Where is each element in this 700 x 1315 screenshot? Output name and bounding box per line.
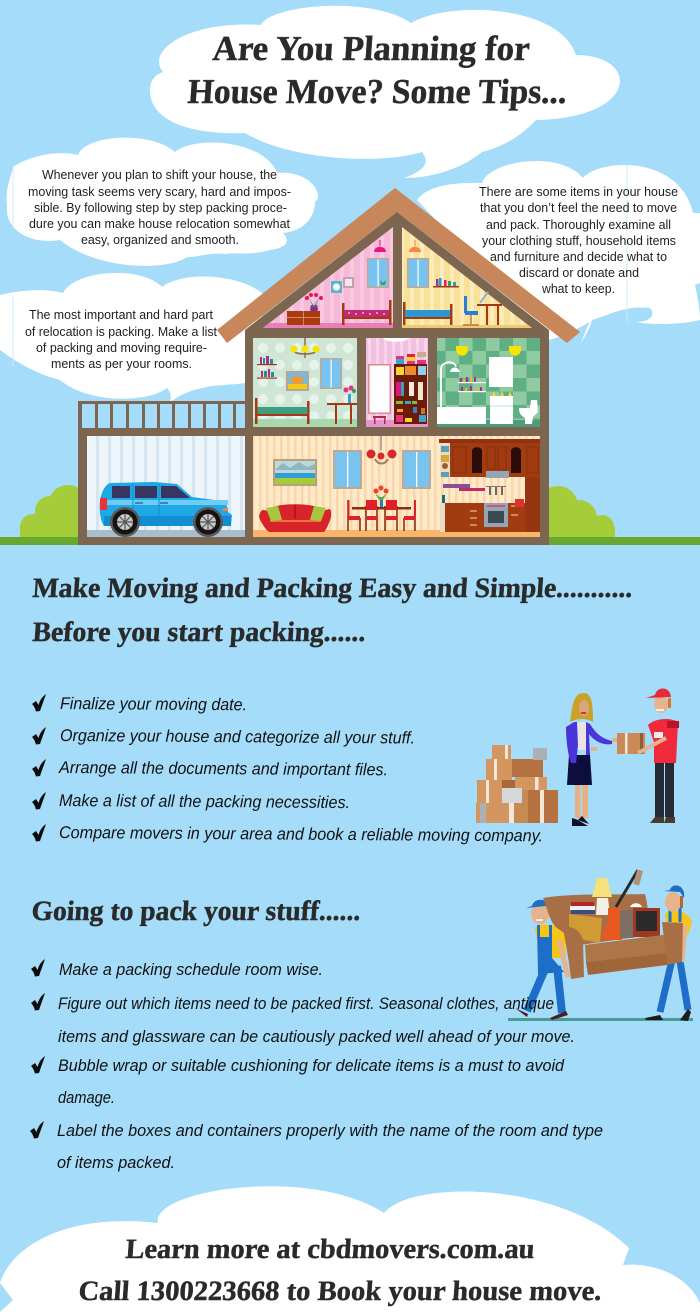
mirror [489, 357, 513, 387]
ground [0, 537, 700, 545]
toy [601, 908, 625, 940]
seat [585, 934, 670, 962]
item 1: Finalize your moving date. [60, 694, 247, 714]
room: green bedroom [253, 338, 357, 427]
cardboard box [569, 914, 602, 943]
room: pink bedroom [263, 227, 393, 328]
wheels [110, 507, 223, 537]
wardrobe [394, 364, 427, 424]
text block: most important: The most important and hard part [29, 308, 214, 322]
picture [273, 459, 317, 486]
illustration: movers carrying sofa [508, 869, 693, 1021]
hockey stick [616, 870, 638, 907]
flowers [344, 386, 356, 404]
item 5: Compare movers in your area and book a reliable moving company. [59, 823, 543, 845]
title: House Move? Some Tips... [186, 72, 568, 111]
text block: most important: of packing and moving require- [36, 341, 207, 355]
picture [286, 371, 309, 391]
room: closet [366, 338, 428, 427]
cloud: whenever you plan [7, 138, 318, 266]
text block: whenever you plan: easy, organized and smooth. [81, 233, 239, 247]
house frame [78, 212, 549, 545]
text block: some items: your clothing stuff, household items [482, 234, 676, 248]
item 3: Arrange all the documents and important files. [58, 758, 388, 779]
oven [484, 503, 508, 527]
item 2: Figure out which items need to be packed first. Seasonal clothes, antique [58, 994, 554, 1013]
lamp [592, 878, 612, 915]
window [320, 358, 342, 389]
text block: some items: There are some items in your house [479, 185, 678, 199]
heading: make moving: Before you start packing...... [32, 617, 367, 648]
ceiling lamp [383, 338, 409, 342]
bush left [20, 485, 88, 540]
dresser [287, 311, 320, 325]
balcony railing [78, 401, 245, 430]
text block: some items: that you don’t feel the need to move [480, 201, 677, 215]
wall shelves [443, 484, 506, 495]
chandelier [290, 338, 320, 358]
tv [633, 908, 660, 937]
lower cabinets [440, 477, 540, 532]
text block: whenever you plan [28, 168, 291, 247]
footer call to action [78, 1234, 603, 1307]
stool [373, 416, 386, 424]
faint seam lines in clouds [13, 165, 627, 366]
window [407, 258, 429, 288]
window [367, 258, 389, 288]
item 4 [30, 1121, 603, 1172]
pictures [331, 277, 354, 293]
dining table and chairs [348, 500, 416, 531]
item 4: Make a list of all the packing necessities. [59, 791, 350, 812]
arm left [563, 927, 584, 979]
lamp [374, 240, 386, 252]
item 4: of items packed. [57, 1153, 175, 1172]
mirror [368, 364, 391, 414]
window [333, 450, 362, 489]
cloud: footer [0, 1186, 700, 1315]
roof [217, 188, 580, 343]
chair [463, 296, 479, 325]
ground shadow [508, 1018, 693, 1021]
item 3 [31, 1056, 565, 1107]
toilet [519, 400, 538, 424]
upper cabinets [439, 439, 540, 478]
room: kitchen [439, 436, 540, 537]
washstand [490, 391, 513, 424]
flower vase [305, 293, 323, 315]
bed [255, 398, 310, 424]
item 1: Make a packing schedule room wise. [59, 960, 323, 979]
table [327, 403, 357, 424]
item 2: Organize your house and categorize all your stuff. [60, 726, 415, 747]
arm right [662, 922, 683, 965]
flower vase [374, 486, 388, 508]
text block: some items: and furniture and decide what to [490, 250, 667, 264]
shelves [257, 356, 277, 379]
item 3: damage. [58, 1088, 115, 1107]
heading: make moving [32, 573, 634, 648]
parcel [617, 733, 645, 754]
room: bathroom [437, 338, 540, 427]
shower [441, 362, 460, 408]
bookshelf [433, 278, 459, 288]
title: Are You Planning for [211, 29, 531, 68]
speech cloud: title [150, 6, 620, 178]
ceiling lamps [456, 346, 521, 356]
item 3: Bubble wrap or suitable cushioning for delicate items is a must to avoid [58, 1056, 565, 1075]
text block: whenever you plan: dure you can make house relocation somewhat [29, 217, 291, 231]
window [402, 450, 431, 489]
illustration: stack of boxes [476, 745, 558, 823]
cloud: some items [417, 161, 700, 348]
chandelier [366, 436, 396, 464]
checklist: packing [30, 959, 603, 1172]
text block: most important [25, 308, 218, 371]
mover left [515, 900, 568, 1020]
illustration: woman [566, 693, 618, 826]
item 2 [31, 993, 575, 1046]
room: living and dining [253, 436, 440, 537]
checklist: before packing [32, 694, 543, 845]
text block: most important: of relocation is packing. Make a list [25, 325, 218, 339]
plant [380, 280, 386, 285]
bath tub [437, 407, 486, 424]
boxes on wardrobe [396, 352, 426, 364]
books [570, 902, 595, 914]
mover right [645, 885, 692, 1021]
garage [87, 436, 245, 537]
heading: make moving: Make Moving and Packing Easy and Simple........... [32, 573, 634, 604]
sofa [543, 869, 683, 979]
text block: some items: and pack. Thoroughly examine all [486, 218, 671, 232]
house [78, 188, 580, 545]
cloud: most important [0, 273, 262, 402]
desk and monitor [477, 292, 502, 325]
text block: whenever you plan: sible. By following step by step packing proce- [34, 201, 287, 215]
text block: whenever you plan: Whenever you plan to shift your house, the [42, 168, 277, 182]
lamp [409, 240, 421, 252]
bed [342, 300, 392, 325]
illustration: delivery man [617, 688, 679, 823]
heading: going to pack: Going to pack your stuff...... [31, 896, 362, 927]
bed [403, 302, 452, 325]
spice shelf [440, 444, 450, 478]
radio [620, 910, 633, 938]
room: yellow bedroom [402, 227, 532, 328]
text block: whenever you plan: moving task seems very scary, hard and impos- [28, 185, 291, 199]
item 4: Label the boxes and containers properly with the name of the room and type [57, 1121, 603, 1140]
title [186, 29, 568, 111]
footer call to action: Call 1300223668 to Book your house move. [78, 1276, 603, 1307]
item 2: items and glassware can be cautiously packed well ahead of your move. [58, 1027, 575, 1046]
bush right [538, 486, 615, 539]
car [100, 482, 232, 537]
sofa [259, 504, 331, 532]
text block: some items: what to keep. [541, 282, 615, 296]
shelves of bottles [458, 377, 486, 392]
footer call to action: Learn more at cbdmovers.com.au [125, 1234, 536, 1265]
text block: some items [479, 185, 678, 296]
text block: some items: discard or donate and [519, 266, 639, 280]
text block: most important: ments as per your rooms. [51, 357, 192, 371]
